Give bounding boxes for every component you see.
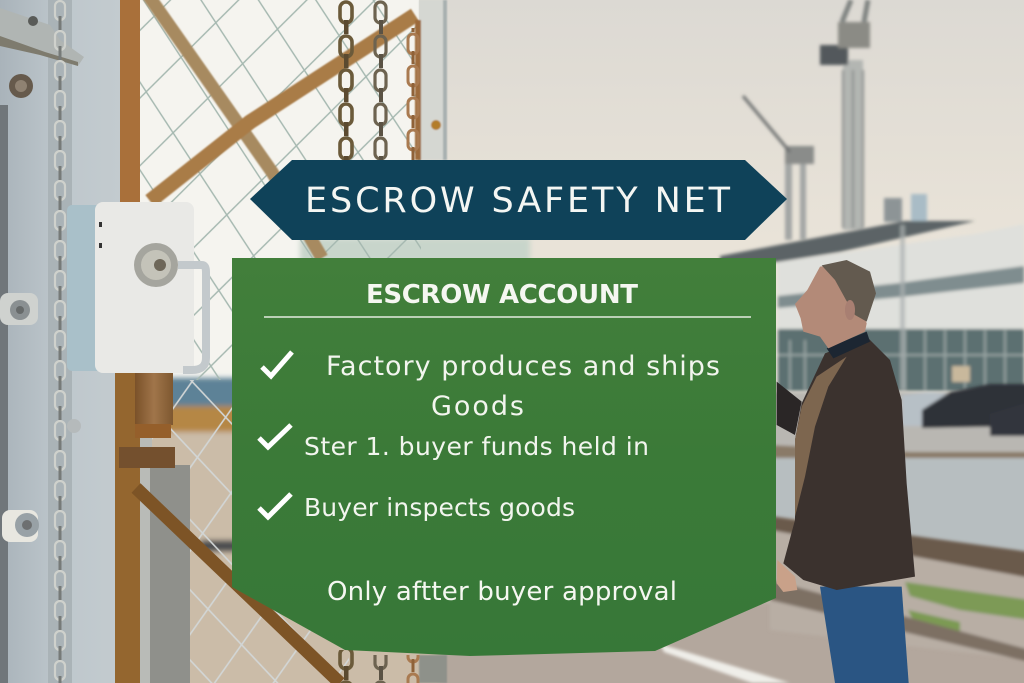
rusty hasp [119,373,175,468]
ear [845,300,855,320]
check item 1: Factory produces and ships [326,351,720,382]
scarf [795,357,847,517]
cars and water [770,384,1024,556]
banner: Escrow Safety Net [250,160,787,240]
tower crane left [743,96,814,240]
rails and grass [660,516,1024,683]
panel: escrow account [232,258,776,656]
collar [827,332,870,358]
raised arm [777,382,802,435]
right gate post [415,0,447,683]
check item 1 [262,351,720,422]
icon: padlock box [67,202,206,373]
face and neck [795,263,867,348]
gate frame [0,0,190,683]
rusty diagonal bracing [148,0,415,258]
hair [822,260,876,322]
panel heading: ESCROW ACCOUNT [366,280,638,310]
check item 3: Buyer inspects goods [304,493,575,522]
cranes [743,0,870,240]
hand [777,560,797,592]
factory building [720,194,1024,391]
banner: Escrow Safety Net: ESCROW SAFETY NET [305,181,731,221]
hanging chains [335,0,421,683]
tower crane right [820,0,870,230]
closing note: Only aftter buyer approval [327,577,677,607]
vertical galvanised chain [52,0,81,683]
man looking at factory [777,260,915,683]
check item 1: Goods [431,391,524,422]
jacket [783,337,915,590]
jeans [820,587,909,683]
chain link fence mesh [139,0,421,683]
lower rust brace [136,488,340,683]
check item 2: Ster 1. buyer funds held in [304,432,649,461]
